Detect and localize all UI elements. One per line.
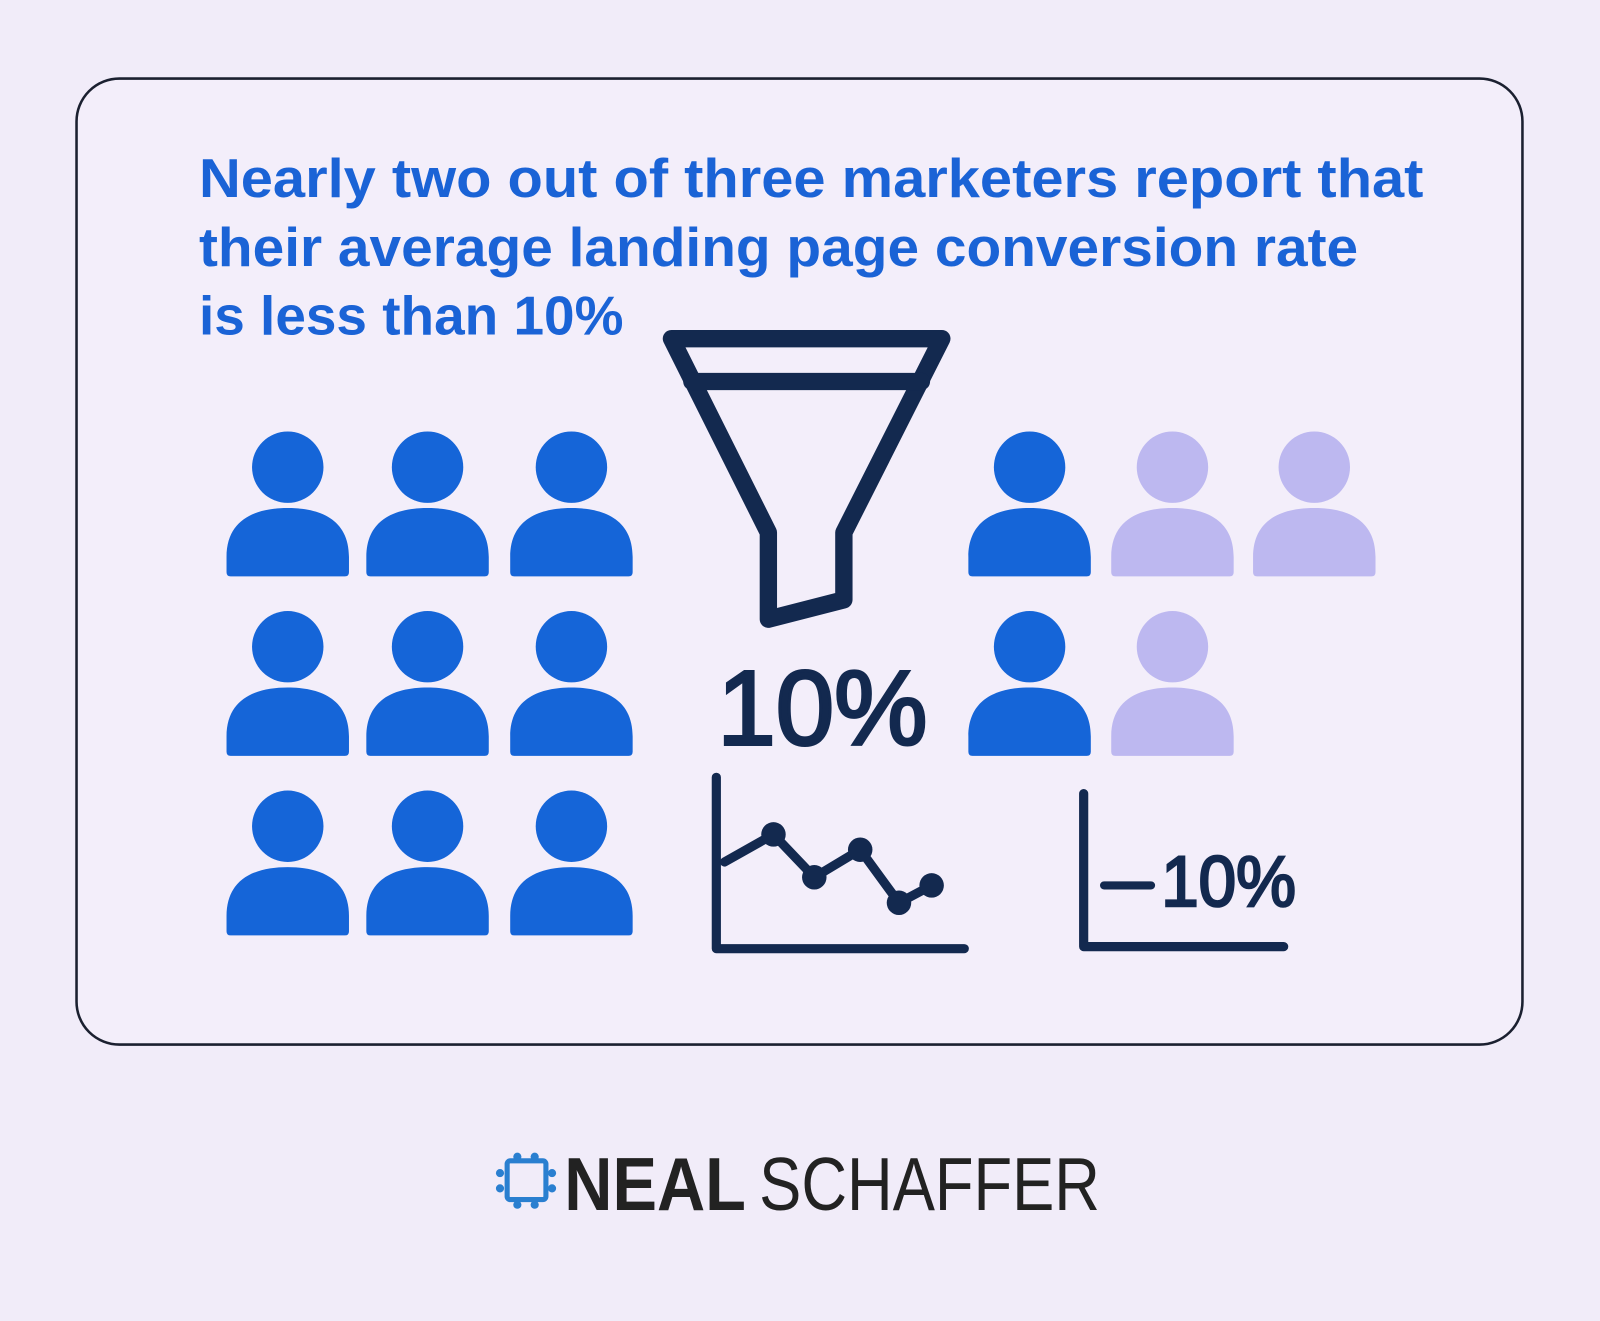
title <box>199 147 1423 347</box>
left people grid <box>227 431 633 935</box>
title: their average landing page conversion rate <box>199 216 1358 278</box>
logo: SCHAFFER <box>759 1142 1100 1226</box>
chart: less than 10% <box>1084 794 1296 947</box>
10% label: 10% <box>717 650 928 768</box>
chart: less than 10%: 10% <box>1161 842 1296 922</box>
right people grid <box>968 431 1376 756</box>
title: Nearly two out of three marketers report that <box>199 147 1423 209</box>
icon: funnel <box>671 339 942 619</box>
icon: logo mark <box>496 1153 556 1209</box>
title: is less than 10% <box>199 285 623 347</box>
chart: declining line <box>716 777 964 949</box>
logo <box>496 1142 1100 1226</box>
panel: main card <box>77 79 1522 1045</box>
logo: NEAL <box>564 1142 746 1226</box>
